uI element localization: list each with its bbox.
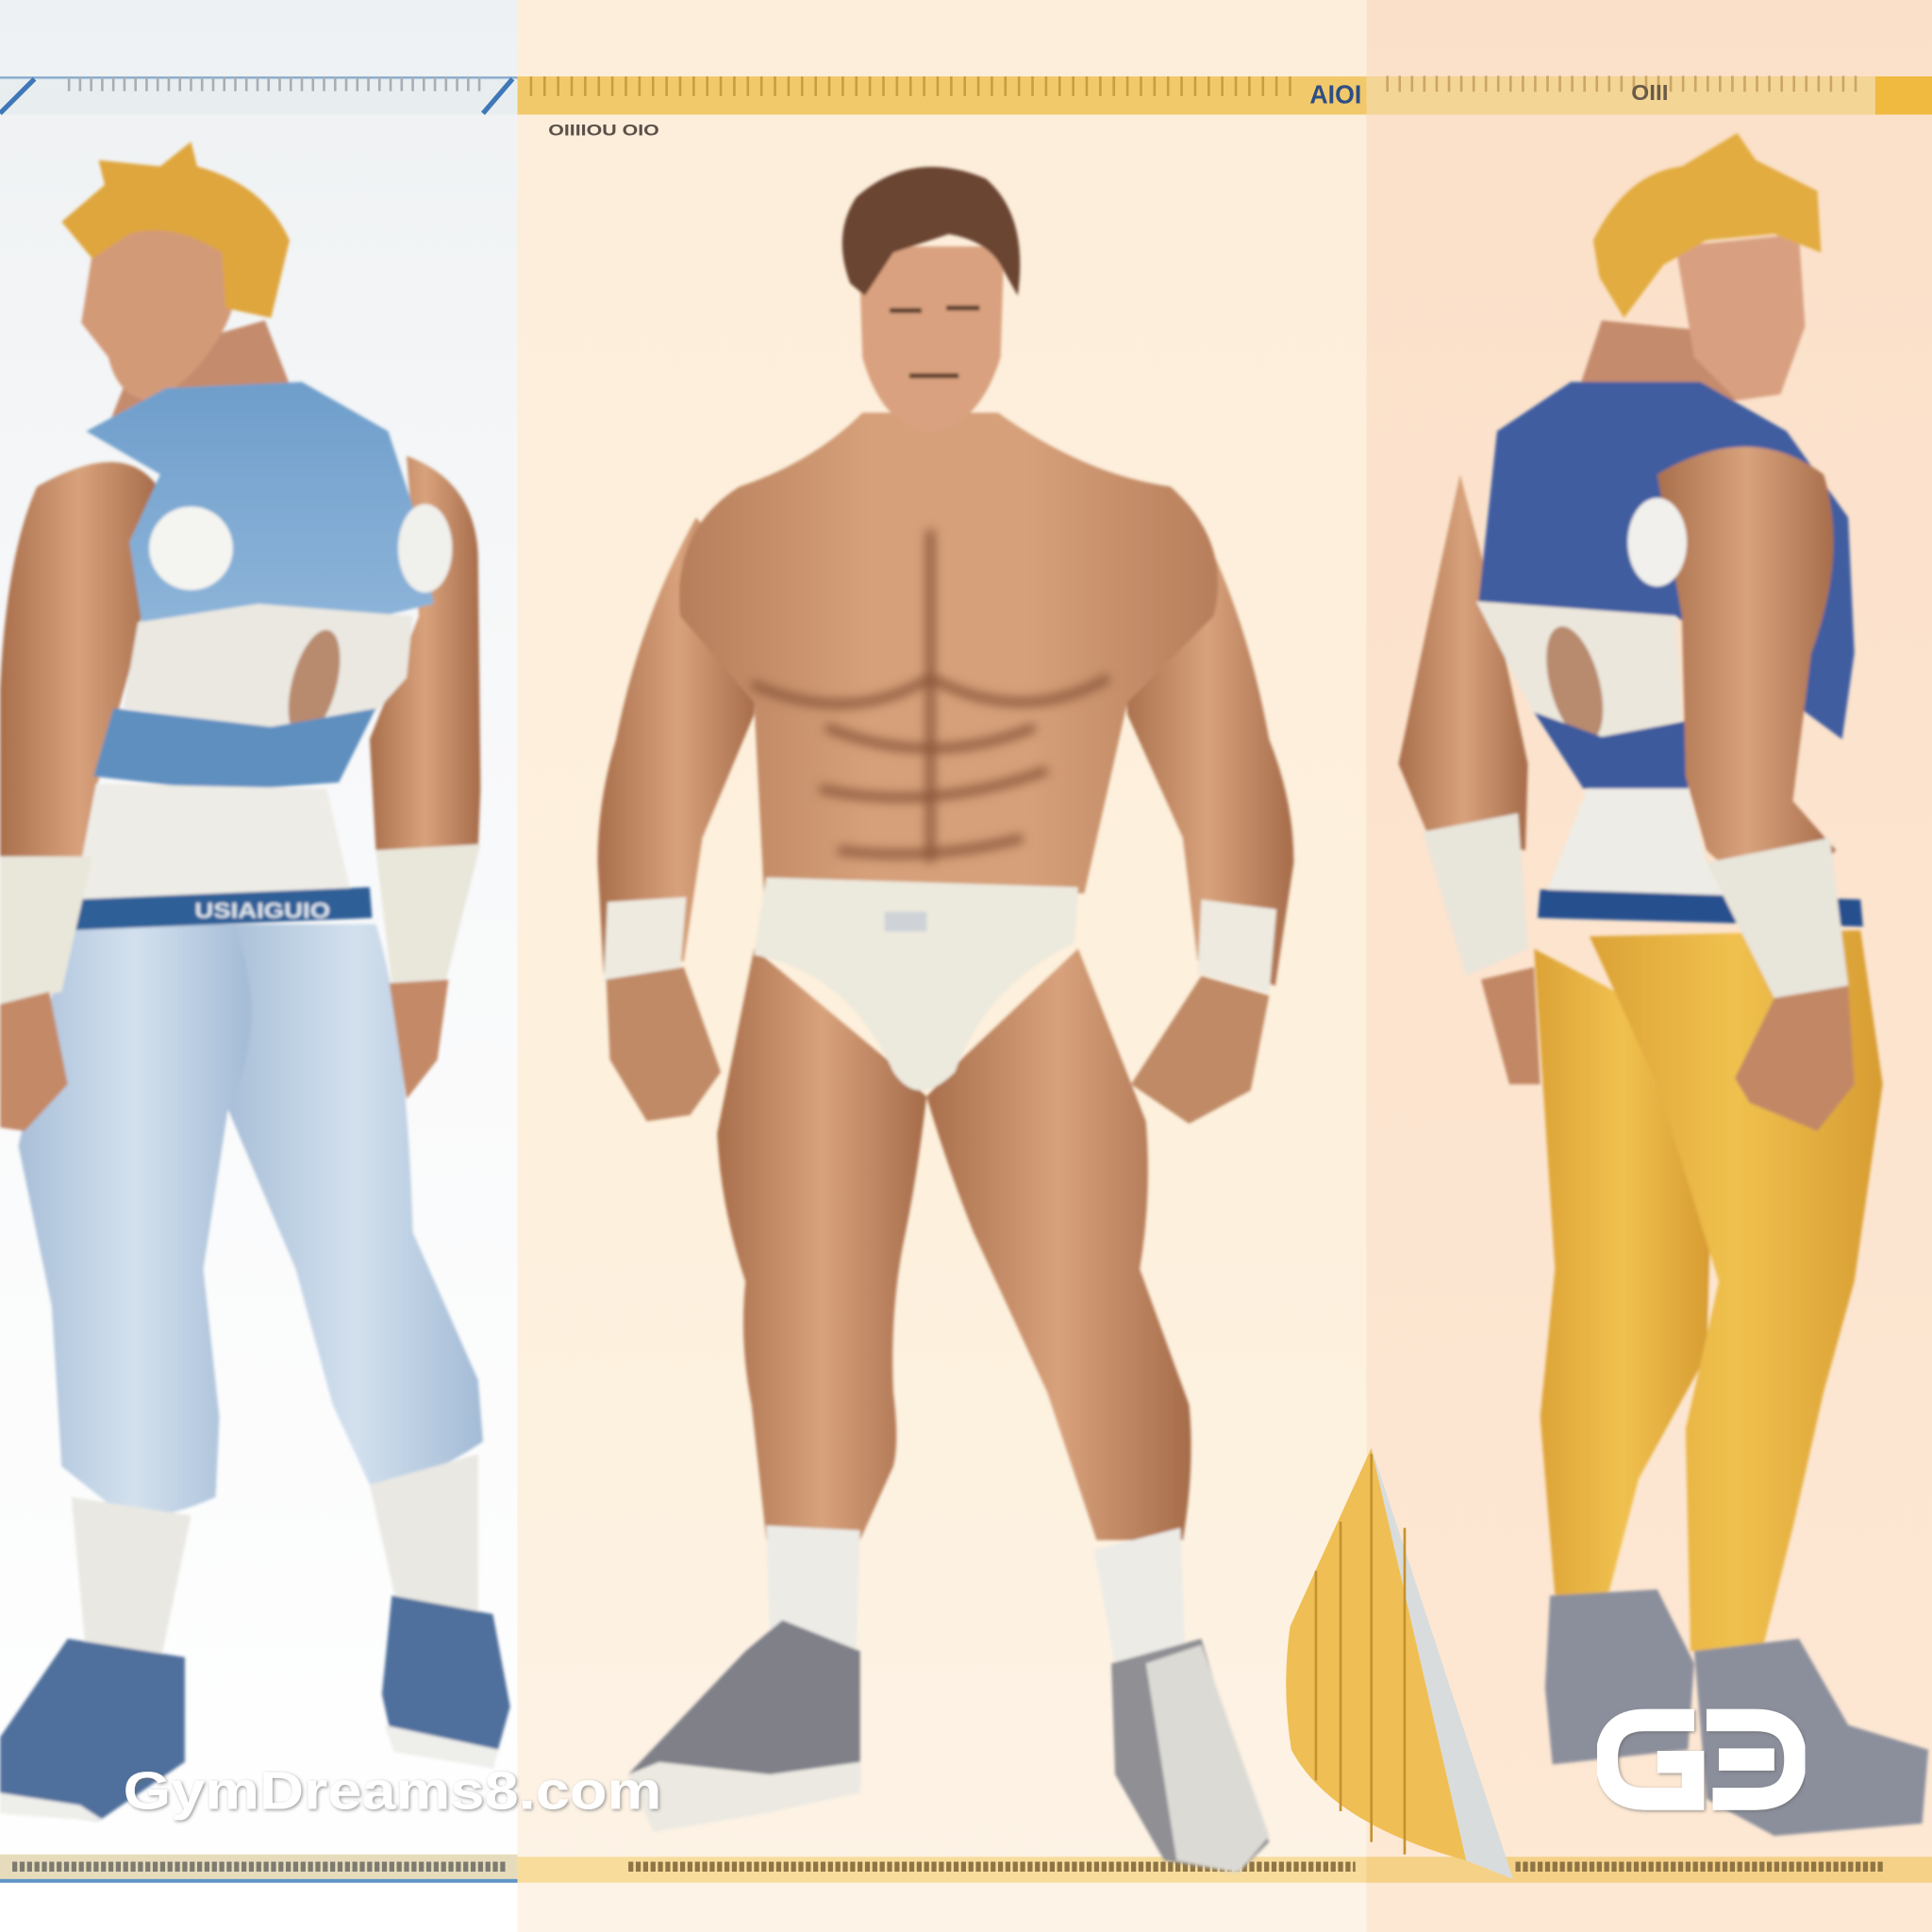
left figure hands — [0, 979, 448, 1131]
center figure wrist bands — [604, 897, 1276, 993]
ruler label: right: OIII — [1631, 80, 1668, 105]
center figure right leg — [926, 949, 1191, 1541]
center figure left arm — [597, 518, 758, 974]
left figure wrist wraps — [0, 844, 480, 1004]
right figure lower vest — [1534, 712, 1688, 789]
left figure socks — [72, 1454, 478, 1663]
figure: right, back three-quarter view — [1398, 133, 1928, 1836]
ruler label: center: AIOI — [1309, 80, 1361, 109]
left figure far arm — [370, 456, 480, 850]
left figure neck — [111, 321, 295, 419]
center figure eyes and mouth — [890, 308, 979, 375]
center figure muscle shading — [752, 530, 1109, 862]
left figure near arm — [0, 462, 158, 862]
right figure waist — [1546, 789, 1774, 906]
center figure hair — [842, 167, 1020, 295]
left figure shoe soles — [0, 1725, 499, 1821]
right figure belt — [1538, 890, 1863, 926]
panel: right background — [1366, 0, 1932, 1932]
left figure far shoulder pad — [398, 504, 452, 592]
left figure shoes — [0, 1595, 510, 1821]
figure: left, back view — [0, 142, 510, 1821]
center figure right shoe toe — [1146, 1645, 1269, 1873]
left figure white harness — [124, 604, 413, 740]
panel: center background — [518, 0, 1366, 1932]
right figure far arm — [1398, 475, 1528, 850]
left figure back slit — [278, 625, 350, 743]
left figure vest — [86, 382, 434, 623]
right figure hands — [1481, 967, 1855, 1131]
shape: yellow sail graphic — [1286, 1448, 1513, 1879]
right figure far leg — [1534, 949, 1710, 1595]
small caption: OIIIIOU OIO — [548, 122, 659, 140]
watermark: site name: GymDreams8.com — [124, 1760, 661, 1820]
left figure head — [81, 215, 237, 400]
right figure wrist wraps — [1424, 813, 1848, 998]
panel: left background — [0, 0, 518, 1932]
right figure hair — [1593, 133, 1821, 318]
right figure back slit — [1536, 621, 1614, 747]
top ruler — [0, 76, 1932, 114]
left figure lower vest — [93, 708, 375, 791]
right figure shoes — [1545, 1590, 1928, 1836]
right figure near leg — [1590, 930, 1883, 1651]
left figure shoulder pad — [149, 507, 233, 591]
left figure waist — [74, 784, 351, 899]
figure: center, front view — [597, 167, 1293, 1873]
left figure belt — [68, 887, 372, 930]
center figure right arm — [1122, 506, 1293, 986]
left figure belt text: USIAIGUIO — [194, 898, 330, 923]
left figure pants near leg — [19, 924, 251, 1517]
right figure shoulder pad — [1627, 498, 1687, 587]
center figure left leg — [717, 949, 926, 1541]
right figure vest — [1478, 382, 1855, 740]
right figure head — [1675, 234, 1805, 400]
center figure left shoe — [628, 1621, 860, 1830]
center figure left shoe sole — [628, 1762, 860, 1832]
center figure waistband label — [885, 912, 926, 931]
left figure pants far leg — [228, 924, 483, 1485]
center figure fists — [607, 967, 1269, 1124]
right figure white harness — [1476, 601, 1682, 740]
left figure hair — [61, 142, 290, 318]
center figure socks — [766, 1525, 1185, 1663]
right figure neck — [1577, 321, 1738, 400]
center figure head — [858, 246, 1004, 434]
center figure right shoe — [1111, 1639, 1269, 1873]
bottom ruler — [0, 1855, 1932, 1883]
center figure torso — [679, 413, 1218, 893]
right figure near arm — [1657, 446, 1836, 912]
watermark: logo — [1607, 1720, 1795, 1799]
center figure briefs — [754, 877, 1078, 1091]
